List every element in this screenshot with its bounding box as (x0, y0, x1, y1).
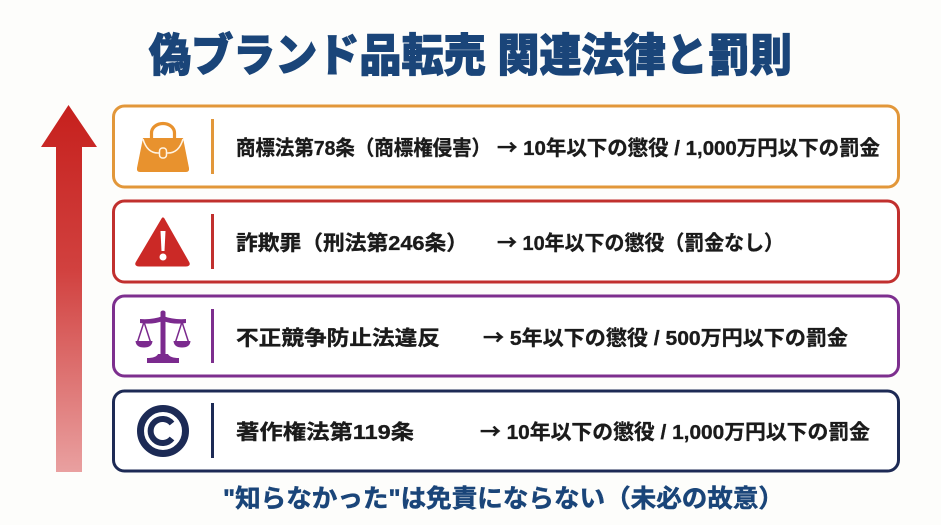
text: unfair competition law: 不正競争防止法違反 (236, 327, 440, 350)
panel: trademark law (114, 106, 898, 187)
icon: copyright (140, 408, 186, 454)
icon: warning triangle (137, 219, 188, 265)
arrow: rising severity (41, 105, 97, 472)
text: trademark penalty: → 10年以下の懲役 / 1,000万円以下の罰金 (497, 131, 880, 161)
title: 偽ブランド品転売 関連法律と罰則 (149, 30, 792, 81)
text: fraud law: 詐欺罪（刑法第246条） (236, 232, 468, 255)
panel: unfair competition (114, 296, 898, 376)
text: fraud penalty: → 10年以下の懲役（罰金なし） (497, 226, 784, 256)
icon: handbag (137, 124, 189, 172)
text: unfair competition penalty: → 5年以下の懲役 / 500万円以下の罰金 (483, 321, 849, 351)
text: copyright penalty: → 10年以下の懲役 / 1,000万円以下の罰金 (480, 415, 871, 445)
icon: scales of justice (136, 310, 190, 363)
panel: fraud (114, 201, 898, 282)
text: copyright law: 著作権法第119条 (236, 421, 414, 444)
panel: copyright law (114, 391, 898, 471)
footer note: "知らなかった"は免責にならない（未必の故意） (223, 485, 784, 513)
text: trademark law: 商標法第78条（商標権侵害） (236, 137, 491, 160)
